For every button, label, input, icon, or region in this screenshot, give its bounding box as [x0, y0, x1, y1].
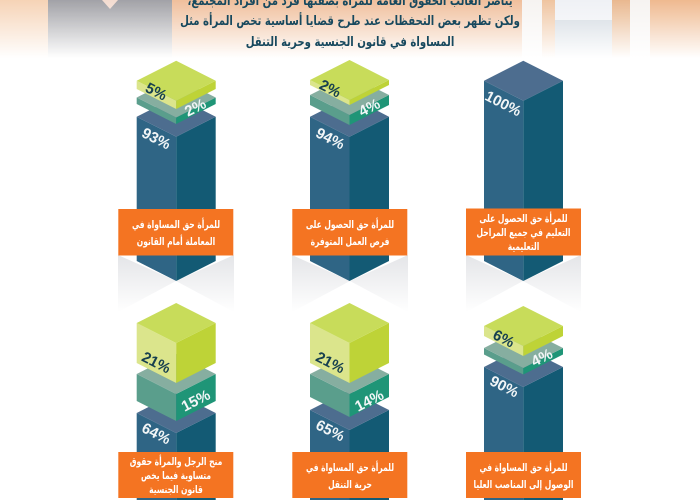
caption box: [118, 209, 233, 256]
block: 6 percent: [484, 306, 563, 356]
caption box: [292, 452, 407, 498]
value labels: 14%: [352, 387, 387, 415]
caption box: للمرأة حق الحصول على: [306, 218, 394, 231]
panel: access to top positions: [466, 306, 581, 500]
value labels: 4%: [528, 346, 556, 370]
value labels: 94%: [313, 125, 347, 153]
value labels: 21%: [139, 349, 173, 377]
column: 100 percent: [484, 61, 563, 281]
column: 64 percent: [137, 393, 216, 500]
caption box: فرص العمل المتوفرة: [311, 237, 389, 248]
value labels: 15%: [179, 387, 213, 415]
caption box: التعليم في جميع المراحل: [477, 228, 570, 239]
value labels: 21%: [313, 349, 347, 377]
value labels: 5%: [142, 80, 170, 104]
value labels: 65%: [313, 417, 347, 445]
value labels: 4%: [356, 96, 383, 120]
panel: access to education: [466, 61, 581, 281]
block: 4 percent: [484, 328, 563, 374]
caption box: حرية التنقل: [328, 480, 372, 491]
header photo background: [0, 0, 700, 58]
caption box: [292, 209, 407, 256]
block: 21 percent: [137, 303, 216, 383]
value labels: [313, 77, 383, 153]
value labels: [139, 349, 213, 448]
caption box: قانون الجنسية: [149, 485, 203, 496]
value labels: 2%: [182, 96, 209, 120]
value labels: [139, 80, 209, 153]
heading text: [180, 0, 520, 50]
value labels: [487, 327, 556, 401]
value labels: 90%: [487, 373, 521, 401]
column: 94 percent: [310, 97, 389, 281]
value labels: 6%: [490, 327, 517, 351]
block: 21 percent: [310, 303, 389, 383]
block: 14 percent: [310, 354, 389, 417]
caption box: [466, 208, 581, 256]
value labels: 64%: [139, 420, 173, 448]
value label: 100%: [482, 88, 524, 120]
shadows under top row columns: [118, 255, 581, 312]
panel: equal nationality rights: [118, 303, 233, 500]
block: 2 percent: [310, 60, 389, 105]
panel: freedom of movement: [292, 303, 407, 500]
heading text: المساواة في قانون الجنسية وحرية التنقل: [246, 34, 454, 50]
column: 65 percent: [310, 390, 389, 500]
panel: access to available jobs: [292, 60, 407, 281]
caption box: للمرأة حق المساواة في: [132, 218, 220, 231]
column: 90 percent: [484, 347, 563, 500]
caption box: للمرأة حق الحصول على: [479, 212, 568, 225]
caption box: منح الرجل والمرأة حقوق: [130, 455, 222, 468]
block: 2 percent: [137, 78, 216, 124]
block: 4 percent: [310, 75, 389, 125]
caption box: [118, 452, 233, 498]
caption box: الوصول إلى المناصب العليا: [474, 480, 573, 491]
value labels: 2%: [316, 77, 344, 101]
caption box: المعاملة أمام القانون: [137, 235, 215, 248]
column: 93 percent: [137, 97, 216, 281]
caption box: متساوية فيما يخص: [141, 471, 211, 482]
value labels: 93%: [139, 125, 173, 153]
caption box: [466, 452, 581, 498]
caption box: للمرأة حق المساواة في: [479, 461, 568, 474]
block: 15 percent: [137, 354, 216, 421]
panel: equality before the law: [118, 61, 233, 281]
heading text: ولكن تظهر بعض التحفظات عند طرح قضايا أساسية تخص المرأة مثل: [180, 12, 520, 29]
value labels: [313, 349, 387, 445]
caption box: للمرأة حق المساواة في: [306, 461, 394, 474]
block: 5 percent: [137, 61, 216, 109]
caption box: التعليمية: [508, 242, 539, 253]
